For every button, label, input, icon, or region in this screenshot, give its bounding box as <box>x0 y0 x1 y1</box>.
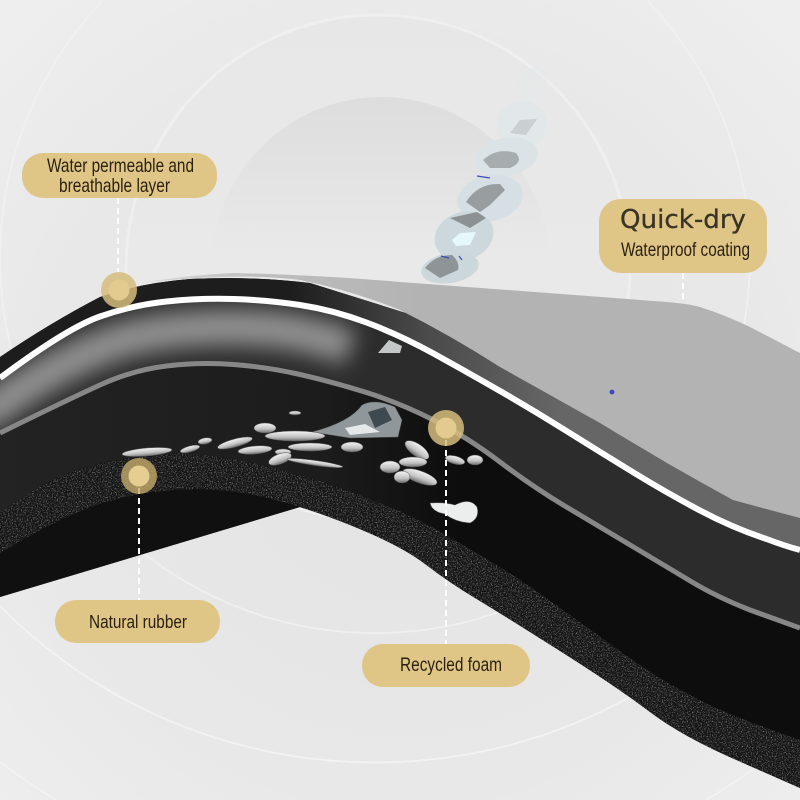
callout: water permeable and breathable layer <box>22 153 217 198</box>
water droplets spreading through the layers <box>122 402 483 523</box>
water stream falling onto the top sheet <box>419 62 553 288</box>
callout: natural rubber: Natural rubber <box>89 611 187 632</box>
marker dot: breathable layer <box>101 272 137 308</box>
callout: quick-dry waterproof coating: Waterproof coating <box>621 240 750 261</box>
marker dot: natural rubber <box>121 458 157 494</box>
left highlight on carbon layer <box>0 327 350 418</box>
lower-left solid rubber <box>0 489 300 597</box>
white stripe <box>0 299 800 550</box>
gray seam <box>0 364 800 628</box>
layer: waterproof coating sheet <box>140 273 800 518</box>
layer: carbon mesh between stripe and seam <box>0 299 800 628</box>
shoe insole cross-section <box>0 273 800 800</box>
water drop under stripe <box>378 340 402 353</box>
blue dot on sheet <box>610 390 614 394</box>
black silhouette base <box>0 278 800 788</box>
leader line: recycled foam <box>445 440 447 644</box>
callout: water permeable and breathable layer: breathable layer <box>59 175 170 197</box>
callout: recycled foam: Recycled foam <box>400 655 502 676</box>
callout: water permeable and breathable layer: Water permeable and <box>47 155 194 177</box>
callout: recycled foam <box>362 644 530 687</box>
marker dot: recycled foam <box>428 410 464 446</box>
callout: quick-dry waterproof coating: Quick-dry <box>620 205 746 235</box>
dark band under top sheet <box>0 278 800 560</box>
foam speckle band <box>0 440 800 800</box>
callout: quick-dry waterproof coating <box>599 199 767 273</box>
black mesh under seam <box>0 364 800 740</box>
callout: natural rubber <box>55 600 220 643</box>
leader line: quick-dry <box>682 273 684 303</box>
leader line: natural rubber <box>138 488 140 600</box>
leader line: breathable layer <box>117 198 119 282</box>
